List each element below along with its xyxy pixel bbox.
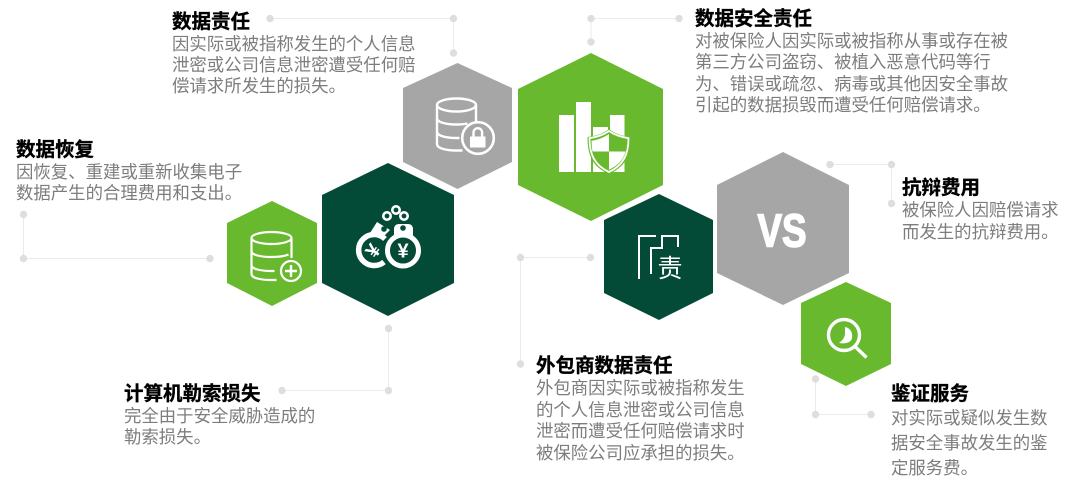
text: defence costs: 抗辩费用 [902,177,980,199]
icon: database with lock [437,98,494,154]
text: data security liability: 引起的数据损毁而遭受任何赔偿请求。 [695,95,991,115]
text: forensic services: 对实际或疑似发生数 [891,408,1048,428]
icon: database with plus [252,232,301,281]
text: defence costs: 被保险人因赔偿请求 [902,200,1059,220]
hexagon: gray VS [717,152,849,305]
icon: VS text: VS [758,204,806,256]
text: data security liability [695,8,1008,115]
text: defence costs [902,176,1059,242]
connector: data liability [266,15,457,57]
text: data recovery [16,139,242,203]
text: data recovery: 数据产生的合理费用和支出。 [16,183,242,203]
hexagon: green chart [518,53,663,221]
hexagon: gray database lock [403,63,512,189]
icon: handcuffs with currency: ¥ [362,239,387,262]
connector: data security liability [587,15,683,46]
text: outsourcer liability: 被保险公司应承担的损失。 [536,442,745,462]
icon: outsourcing glyph [639,236,683,285]
hexagon: dark handcuffs [322,163,454,316]
text: data recovery: 数据恢复 [16,139,94,161]
text: forensic services: 定服务费。 [891,458,978,478]
text: forensic services [891,383,1048,478]
icon: handcuffs with currency: ¥ [397,240,409,262]
text: outsourcer liability: 的个人信息泄密或公司信息 [536,400,745,420]
text: outsourcer liability: 泄密而遭受任何赔偿请求时 [536,421,745,441]
text: data liability: 偿请求所发生的损失。 [172,76,346,96]
text: data liability: 泄密或公司信息泄密遭受任何赔 [172,55,415,75]
connector: data recovery [20,211,214,262]
text: ransomware loss: 计算机勒索损失 [124,383,261,405]
text: data recovery: 因恢复、重建或重新收集电子 [16,162,242,182]
text: outsourcer liability [536,355,745,462]
text: ransomware loss [124,383,315,447]
text: forensic services: 鉴证服务 [891,383,969,405]
text: ransomware loss: 完全由于安全威胁造成的 [124,406,315,426]
hexagon: green database plus [227,201,317,306]
icon: magnifier [828,320,866,358]
text: data security liability: 第三方公司盗窃、被植入恶意代码等行 [695,52,991,72]
text: outsourcer liability: 外包商数据责任 [536,355,673,377]
connector: forensic services [812,375,875,418]
text: data liability [172,11,415,96]
text: defence costs: 而发生的抗辩费用。 [902,222,1059,242]
text: data liability: 数据责任 [172,11,250,33]
connector: outsourcer liability [517,254,594,368]
text: ransomware loss: 勒索损失。 [124,427,211,447]
hexagon: dark outsourcer [604,194,713,320]
icon: bar chart with shield [559,102,630,174]
text: data security liability: 为、错误或疏忽、病毒或其他因安全事故 [695,74,1008,94]
text: data security liability: 对被保险人因实际或被指称从事或存在被 [695,31,1008,51]
icon: handcuffs with currency [359,206,418,266]
connector: defence costs [826,161,895,207]
connector: ransomware loss [278,325,392,394]
text: outsourcer liability: 外包商因实际或被指称发生 [536,378,745,398]
hexagon: green search [801,282,891,386]
text: forensic services: 据安全事故发生的鉴 [891,433,1048,453]
text: data liability: 因实际或被指称发生的个人信息 [172,34,415,54]
icon: outsourcing glyph: 责 [657,249,683,285]
text: data security liability: 数据安全责任 [695,8,812,30]
